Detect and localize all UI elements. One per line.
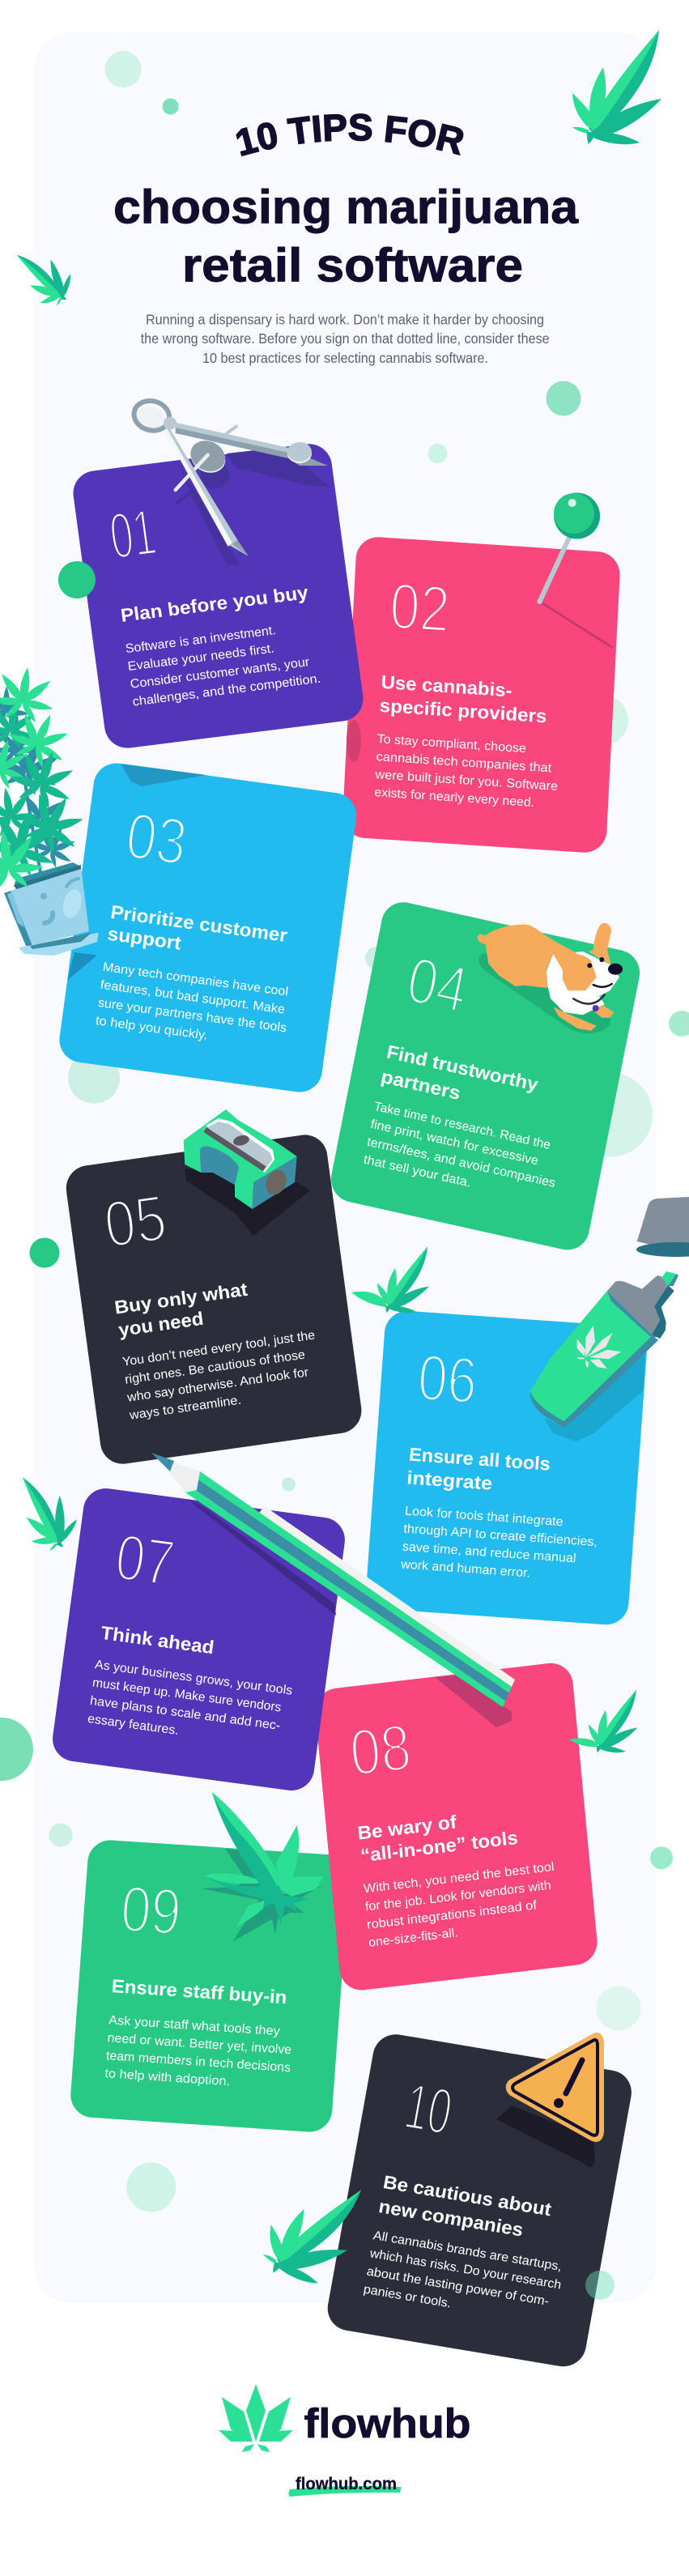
heading 07: Think ahead xyxy=(100,1622,215,1658)
body 10: All cannabis brands are startups, xyxy=(372,2229,563,2274)
body 10: which has risks. Do your research xyxy=(368,2246,563,2293)
body 05: ways to streamline. xyxy=(128,1393,242,1423)
body 05: who say otherwise. And look for xyxy=(125,1365,309,1405)
leaf left of card 07 xyxy=(0,1476,84,1556)
body 07: have plans to scale and add nec- xyxy=(89,1694,281,1733)
body 10: about the lasting power of com- xyxy=(366,2264,550,2309)
body 06: save time, and reduce manual xyxy=(402,1539,576,1565)
body 09 xyxy=(104,2013,294,2093)
card 08 background xyxy=(313,1661,599,1993)
background panel xyxy=(34,32,656,2303)
body 08: one-size-fits-all. xyxy=(368,1926,458,1950)
body 03 xyxy=(95,960,292,1054)
body 01 xyxy=(125,619,321,709)
heading 09: Ensure staff buy-in xyxy=(111,1975,287,2008)
body 04: Take time to research. Read the xyxy=(373,1100,552,1152)
body 09: need or want. Better yet, involve xyxy=(107,2031,292,2057)
icon: leaf top right xyxy=(572,30,661,144)
plant pot xyxy=(4,862,99,956)
body 10: panies or tools. xyxy=(363,2283,453,2310)
body 04: that sell your data. xyxy=(363,1152,472,1190)
heading 02: Use cannabis- xyxy=(381,671,512,700)
number 10: 10 xyxy=(400,2070,457,2148)
leaf between cards 04 and 05 xyxy=(351,1246,429,1313)
number 05: 05 xyxy=(100,1182,171,1261)
body 02: To stay compliant, choose xyxy=(376,732,526,756)
dot over card 10 xyxy=(585,2271,615,2300)
card 07 background xyxy=(50,1485,347,1793)
body 06: work and human error. xyxy=(400,1557,531,1581)
title: choosing marijuana retail software: retail software xyxy=(182,240,523,292)
icon: potted plant xyxy=(0,663,99,956)
icon: pin xyxy=(539,492,613,648)
heading 05: Buy only what xyxy=(113,1279,249,1318)
body 08: for the job. Look for vendors with xyxy=(364,1879,551,1914)
body 02: exists for nearly every need. xyxy=(374,786,534,810)
body 01: Evaluate your needs first. xyxy=(127,641,275,674)
intro text: the wrong software. Before you sign on that dotted line, consider these xyxy=(141,330,550,347)
body 02: were built just for you. Software xyxy=(374,768,558,794)
card 09 xyxy=(69,1839,351,2133)
intro text: 10 best practices for selecting cannabis software. xyxy=(202,350,488,366)
body 03: to help you quickly. xyxy=(95,1014,209,1043)
leaf shadow on card 09 xyxy=(201,1849,320,1941)
icon: leaf left of title xyxy=(9,253,73,308)
plant front foliage xyxy=(0,663,95,863)
heading 06 xyxy=(406,1443,551,1498)
body 09: team members in tech decisions xyxy=(105,2049,291,2075)
icon: bottle xyxy=(530,1271,678,1441)
heading 10: new companies xyxy=(377,2195,525,2241)
pencil shadow on card 08 xyxy=(435,1675,512,1727)
icon: logo leaf xyxy=(219,2384,293,2452)
body 10 xyxy=(362,2229,566,2328)
number 07: 07 xyxy=(112,1521,178,1599)
number 04: 04 xyxy=(402,943,474,1027)
website link: flowhub.com xyxy=(296,2475,397,2493)
number 09: 09 xyxy=(118,1872,184,1948)
logo: flowhub xyxy=(219,2384,471,2452)
number 02: 02 xyxy=(388,569,452,645)
number 08: 08 xyxy=(347,1710,414,1790)
title: choosing marijuana retail software xyxy=(113,181,579,292)
card 10 background xyxy=(324,2031,635,2369)
card 09 background xyxy=(69,1839,351,2133)
title: choosing marijuana retail software: choosing marijuana xyxy=(113,181,579,233)
dot over card 01 xyxy=(58,561,96,598)
plant stems and back foliage xyxy=(0,687,83,874)
body 06: through API to create efficiencies, xyxy=(403,1522,598,1549)
shadows on card 03 xyxy=(68,764,206,980)
body 07: must keep up. Make sure vendors xyxy=(91,1675,283,1715)
heading 05 xyxy=(113,1279,252,1340)
body 04: terms/fees, and avoid companies xyxy=(366,1135,557,1190)
big leaf over card 09 xyxy=(204,1792,324,1927)
body 02 xyxy=(373,732,560,811)
body 04 xyxy=(363,1100,564,1208)
heading 03: support xyxy=(106,923,183,954)
body 03: features, but bad support. Make xyxy=(100,978,286,1017)
card 02 xyxy=(342,536,621,854)
body 07: As your business grows, your tools xyxy=(94,1658,293,1698)
heading 04: partners xyxy=(379,1066,462,1104)
body 01: Software is an investment. xyxy=(125,624,277,656)
heading 08 xyxy=(356,1804,519,1867)
body 08: robust integrations instead of xyxy=(366,1898,538,1932)
body 07: essary features. xyxy=(87,1712,180,1738)
intro text xyxy=(141,311,550,366)
card 03 xyxy=(57,760,359,1095)
heading 06: integrate xyxy=(406,1467,493,1494)
body 05 xyxy=(121,1328,323,1423)
body 01: Consider customer wants, your xyxy=(130,655,310,692)
body 09: to help with adoption. xyxy=(104,2067,231,2088)
heading 04: Find trustworthy xyxy=(385,1041,540,1095)
heading 02 xyxy=(379,671,549,726)
card 10 xyxy=(324,2031,635,2369)
title: 10 tips for: 10 TIPS FOR xyxy=(236,113,463,157)
body 05: You don’t need every tool, just the xyxy=(121,1328,316,1369)
card 02 background xyxy=(342,536,621,854)
icon: cap xyxy=(636,1197,689,1257)
body 06 xyxy=(400,1504,599,1585)
heading 01: Plan before you buy xyxy=(119,581,309,626)
heading 06: Ensure all tools xyxy=(408,1444,551,1475)
number 01: 01 xyxy=(105,496,160,573)
heading 02: specific providers xyxy=(379,695,547,726)
card 03 background xyxy=(57,760,359,1095)
body 08 xyxy=(363,1860,560,1950)
intro text: Running a dispensary is hard work. Don’t make it harder by choosing xyxy=(146,311,544,327)
body 03: Many tech companies have cool xyxy=(102,960,289,999)
card 01 xyxy=(70,441,366,751)
body 06: Look for tools that integrate xyxy=(404,1505,564,1529)
body 05: right ones. Be cautious of those xyxy=(124,1348,306,1387)
shadow on card 02 xyxy=(347,720,361,762)
heading 03 xyxy=(106,901,289,968)
card 06 background xyxy=(364,1309,649,1626)
icon: pencil xyxy=(151,1453,515,1707)
body 09: Ask your staff what tools they xyxy=(108,2013,281,2038)
body 02: cannabis tech companies that xyxy=(376,750,552,775)
heading 05: you need xyxy=(117,1308,205,1340)
body 04: fine print, watch for excessive xyxy=(369,1118,539,1168)
card 01 background xyxy=(70,441,366,751)
card 06 xyxy=(364,1309,649,1626)
body 01: challenges, and the competition. xyxy=(132,672,321,709)
heading 10: Be cautious about xyxy=(381,2171,553,2220)
heading 08: Be wary of xyxy=(356,1811,457,1844)
card 04 xyxy=(327,898,644,1254)
logo wordmark: flowhub xyxy=(304,2400,471,2446)
icon: sharpener xyxy=(184,1109,310,1236)
icon: compass xyxy=(130,397,330,565)
card 05 background xyxy=(63,1132,364,1467)
body 03: sure your partners have the tools xyxy=(97,996,287,1035)
heading 10 xyxy=(377,2171,553,2244)
heading 03: Prioritize customer xyxy=(109,901,289,946)
body 07 xyxy=(87,1658,293,1752)
leaf left of card 10 xyxy=(259,2169,364,2290)
body 08: With tech, you need the best tool xyxy=(363,1860,555,1896)
icon: corgi xyxy=(477,923,623,1033)
plant overlapping leaves xyxy=(0,801,65,896)
card 04 background xyxy=(327,898,644,1254)
card 08 xyxy=(313,1661,599,1993)
heading 08: “all-in-one” tools xyxy=(359,1827,519,1866)
number 03: 03 xyxy=(122,799,191,879)
number 06: 06 xyxy=(415,1341,479,1417)
card 05 xyxy=(63,1132,364,1467)
icon: warning triangle xyxy=(496,2036,601,2167)
card 07 xyxy=(50,1485,347,1793)
leaf right of card 08 xyxy=(569,1690,638,1752)
heading 04 xyxy=(379,1041,540,1120)
